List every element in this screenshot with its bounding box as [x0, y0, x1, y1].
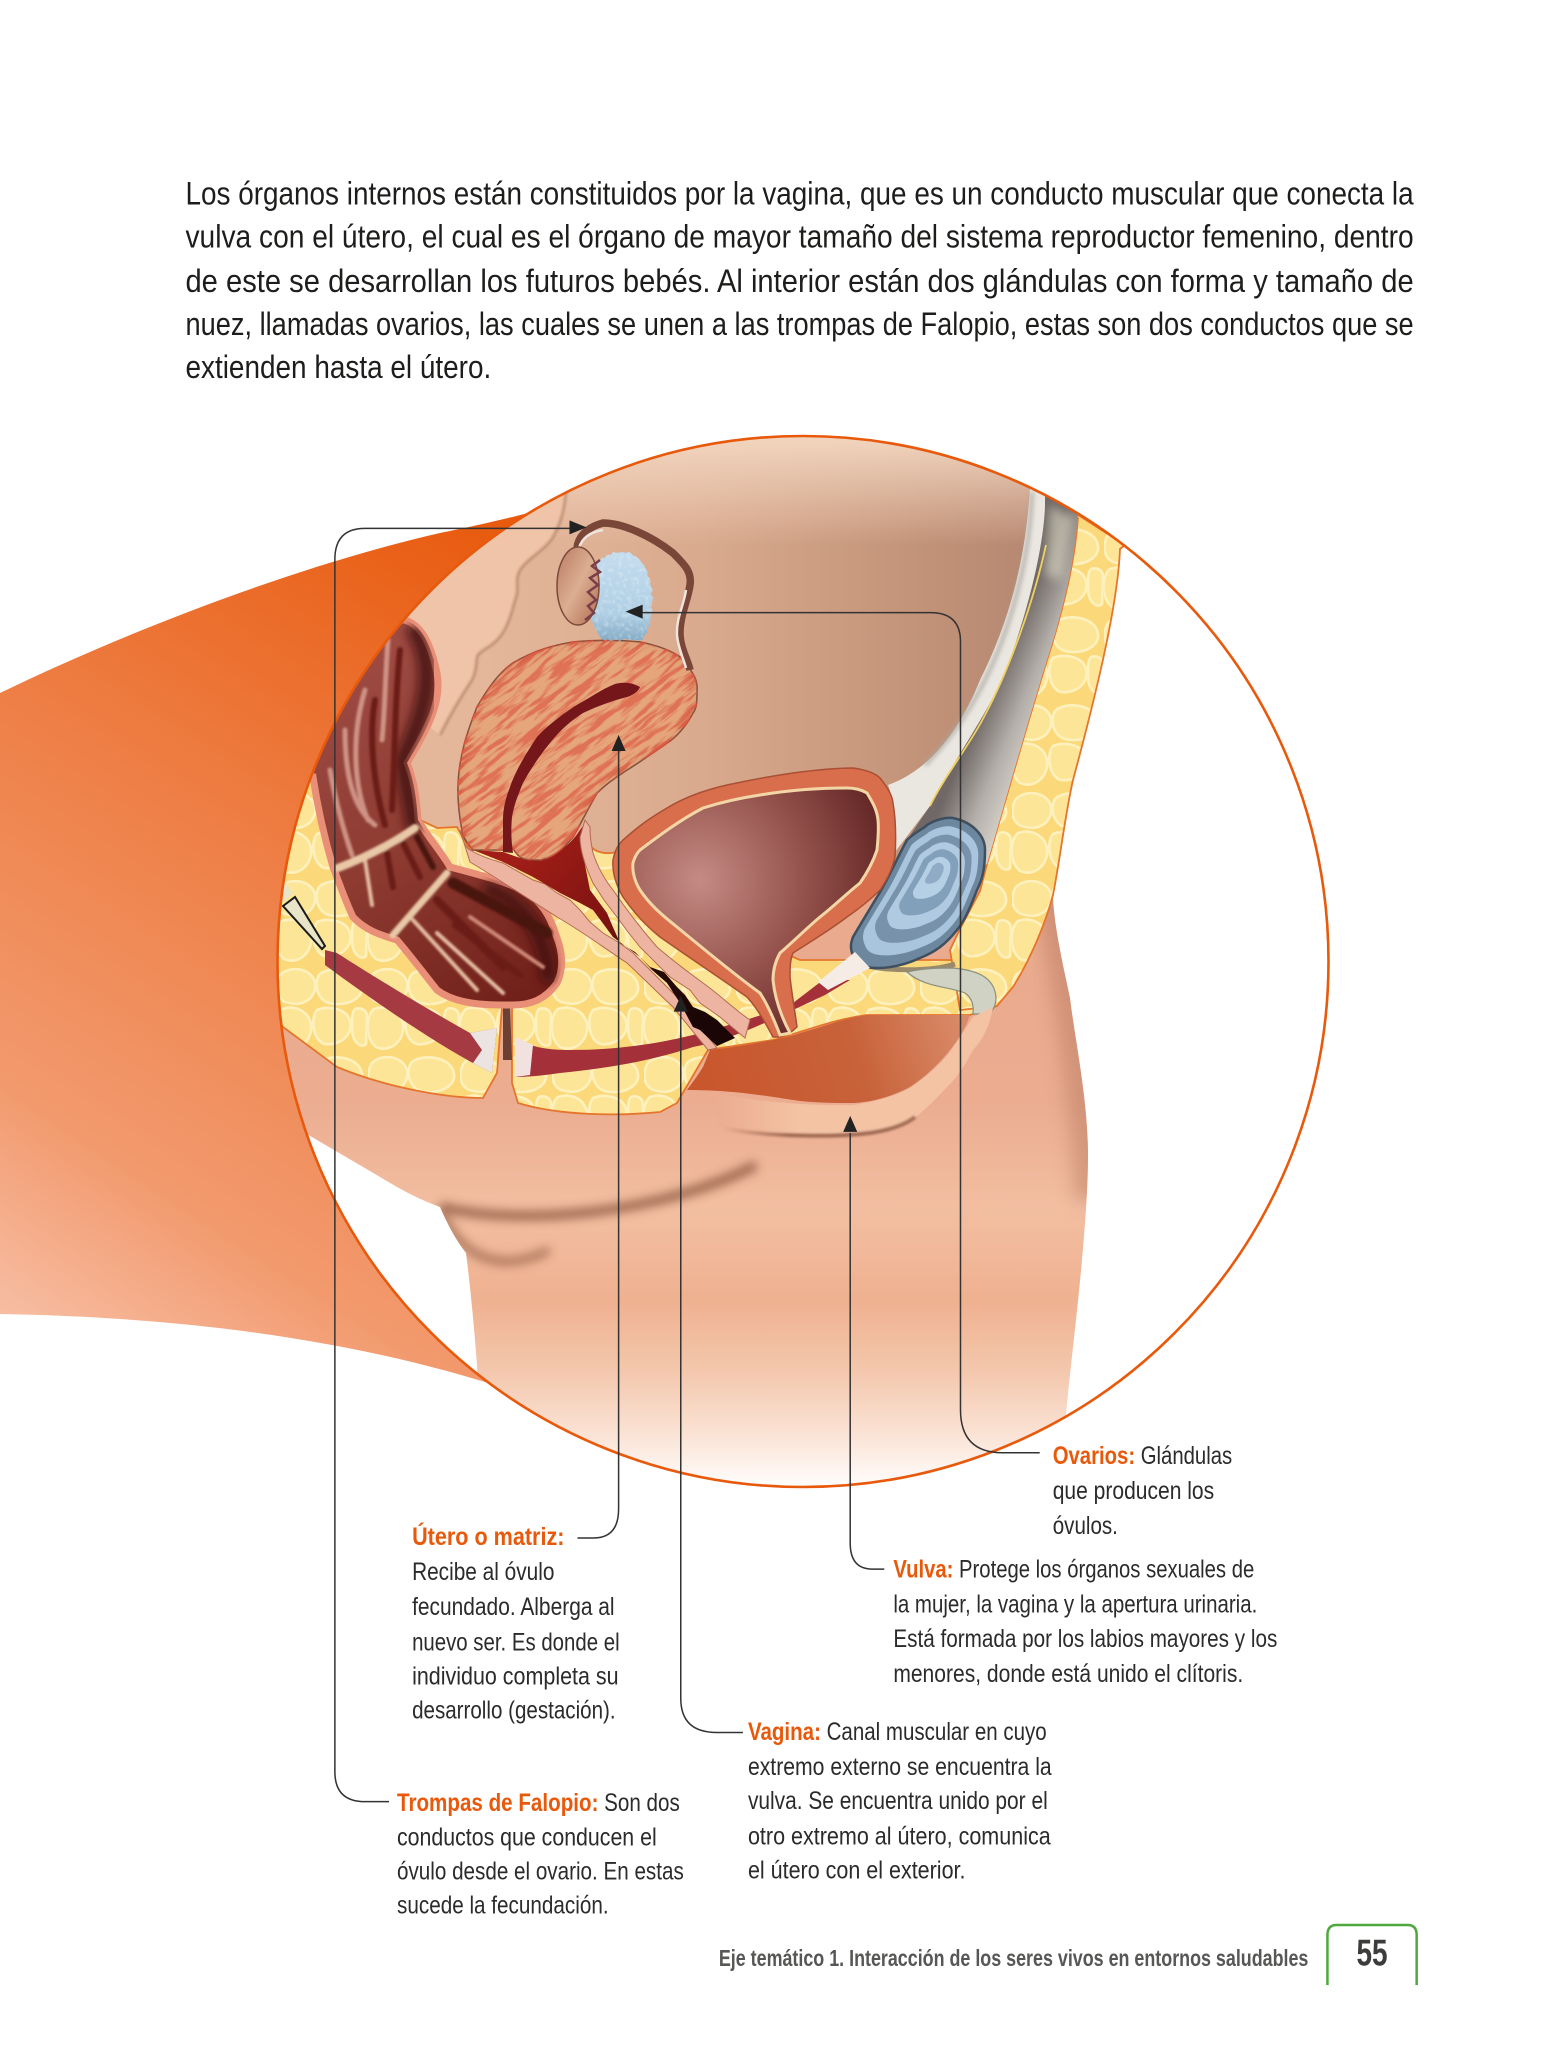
- label: utero o matriz: individuo completa su: [412, 1662, 619, 1690]
- vagina canal: [473, 823, 735, 1046]
- connector: utero: [577, 735, 626, 1538]
- fat tissue abdominal wall: [950, 495, 1125, 1010]
- intro paragraph: vulva con el útero, el cual es el órgano de mayor tamaño del sistema reproductor femenino, dentro: [185, 219, 1414, 255]
- ovary: [587, 552, 652, 640]
- label: vagina: extremo externo se encuentra la: [748, 1753, 1052, 1781]
- vagina lower wall: [460, 830, 717, 1050]
- intro paragraph: de este se desarrollan los futuros bebés. Al interior están dos glándulas con forma y tamaño de: [185, 263, 1414, 299]
- fimbria of the tube: [557, 547, 600, 625]
- pelvic cavity background: [410, 437, 1046, 868]
- circle outline: [278, 436, 1328, 1487]
- label: trompas de falopio: óvulo desde el ovario. En estas: [397, 1857, 684, 1885]
- label: vagina: [748, 1718, 1052, 1884]
- label: trompas de falopio: [397, 1789, 684, 1919]
- label: utero o matriz: [412, 1521, 620, 1724]
- label: trompas de falopio: Trompas de Falopio: Son dos: [397, 1789, 680, 1817]
- pubic bone: [851, 818, 985, 970]
- vagina upper wall: [580, 820, 750, 1038]
- lighter back wall of abdomen: [408, 493, 568, 736]
- connector: ovarios: [626, 605, 1040, 1453]
- fallopian tube: [577, 523, 690, 670]
- lower body skin: [283, 884, 1088, 1480]
- label: vulva: Vulva: Protege los órganos sexuales de: [893, 1556, 1254, 1584]
- coccyx: [282, 882, 325, 949]
- label: utero o matriz: Útero o matriz:: [412, 1521, 564, 1551]
- label: utero o matriz: fecundado. Alberga al: [412, 1593, 615, 1621]
- label: ovarios: óvulos.: [1053, 1512, 1118, 1540]
- anatomical illustration in circle: [260, 420, 1328, 1500]
- intro paragraph: [185, 176, 1414, 385]
- label: vagina: Vagina: Canal muscular en cuyo: [748, 1718, 1047, 1746]
- clitoris: [907, 968, 996, 1014]
- label: vulva: Está formada por los labios mayores y los: [893, 1625, 1277, 1653]
- label: ovarios: [1053, 1442, 1232, 1540]
- intro paragraph: Los órganos internos están constituidos por la vagina, que es un conducto muscular que conecta la: [185, 176, 1414, 212]
- vulva: [687, 1015, 970, 1103]
- connector: vulva: [843, 1116, 884, 1569]
- footer text: Eje temático 1. Interacción de los seres vivos en entornos saludables: [719, 1945, 1308, 1971]
- label: vulva: la mujer, la vagina y la apertura urinaria.: [893, 1591, 1257, 1619]
- label: utero o matriz: Recibe al óvulo: [412, 1558, 554, 1586]
- label: vulva: [893, 1556, 1277, 1688]
- orange swoosh band: [0, 495, 620, 1432]
- label: ovarios: Ovarios: Glándulas: [1053, 1442, 1232, 1470]
- page number tab: 55: [1357, 1932, 1388, 1974]
- label: trompas de falopio: conductos que conducen el: [397, 1823, 657, 1851]
- rectum: [300, 620, 562, 1005]
- peritoneum band grey: [907, 495, 1078, 880]
- perineal muscle bands: [325, 950, 870, 1077]
- fat tissue lower pelvis: [265, 760, 1000, 1114]
- uterus: [457, 640, 698, 861]
- peritoneum band white: [888, 488, 1045, 852]
- label: vagina: el útero con el exterior.: [748, 1856, 966, 1884]
- yellow line on the band: [930, 545, 1046, 806]
- label: vagina: vulva. Se encuentra unido por el: [748, 1787, 1048, 1815]
- label: trompas de falopio: sucede la fecundación.: [397, 1891, 609, 1919]
- connector: trompas de Falopio: [335, 520, 587, 1802]
- label: utero o matriz: desarrollo (gestación).: [412, 1696, 616, 1724]
- label: vagina: otro extremo al útero, comunica: [748, 1822, 1051, 1850]
- labia: [713, 1007, 993, 1136]
- label: vulva: menores, donde está unido el clítoris.: [893, 1660, 1243, 1688]
- bladder: [613, 768, 896, 1037]
- label: utero o matriz: nuevo ser. Es donde el: [412, 1628, 620, 1656]
- intro paragraph: extienden hasta el útero.: [185, 349, 491, 385]
- connector: vagina: [674, 996, 743, 1732]
- page number tab: [1327, 1925, 1417, 1985]
- label: ovarios: que producen los: [1053, 1477, 1214, 1505]
